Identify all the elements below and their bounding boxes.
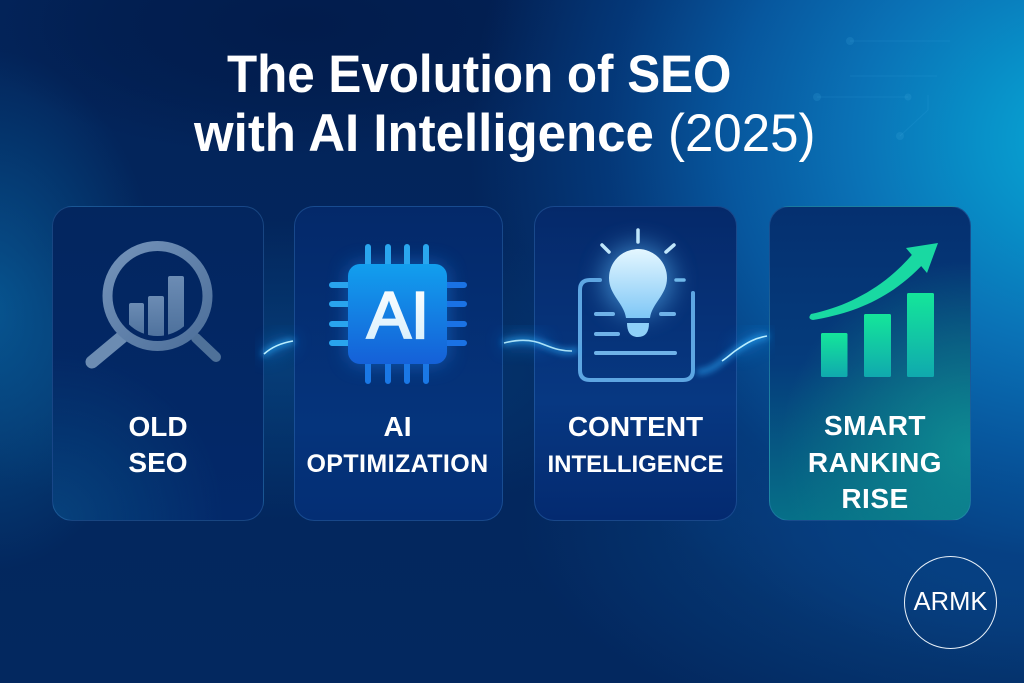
label: ai optimization	[306, 411, 489, 478]
title	[194, 45, 815, 163]
icon: magnifier with bars	[86, 241, 221, 368]
label: smart ranking rise: RISE	[841, 483, 909, 514]
title: with AI Intelligence (2025)	[194, 104, 815, 163]
background circuit traces	[813, 37, 911, 140]
icon: light bulb on document	[578, 228, 695, 382]
label: old seo: SEO	[128, 447, 188, 478]
label: smart ranking rise	[808, 410, 942, 514]
label: old seo: OLD	[128, 411, 188, 442]
label: ai optimization: AI	[384, 411, 412, 442]
panel: ai optimization	[294, 206, 503, 521]
logo badge	[904, 556, 997, 649]
panel: smart ranking rise	[769, 206, 971, 521]
label: smart ranking rise: RANKING	[808, 446, 942, 478]
icon: ai chip	[329, 244, 467, 384]
logo badge: ARMK	[914, 588, 987, 616]
label: smart ranking rise: SMART	[824, 410, 926, 441]
label: content intelligence: INTELLIGENCE	[547, 451, 724, 478]
glowing connector wave	[256, 326, 774, 378]
panel: old seo	[52, 206, 264, 521]
icon: growth chart with arrow	[809, 243, 938, 377]
label: content intelligence	[547, 411, 724, 478]
label: ai optimization: OPTIMIZATION	[306, 450, 489, 478]
icon: ai chip: AI	[367, 278, 429, 352]
panel: content intelligence	[534, 206, 737, 521]
title: The Evolution of SEO	[227, 45, 731, 104]
label: old seo	[128, 411, 188, 478]
label: content intelligence: CONTENT	[568, 411, 703, 442]
